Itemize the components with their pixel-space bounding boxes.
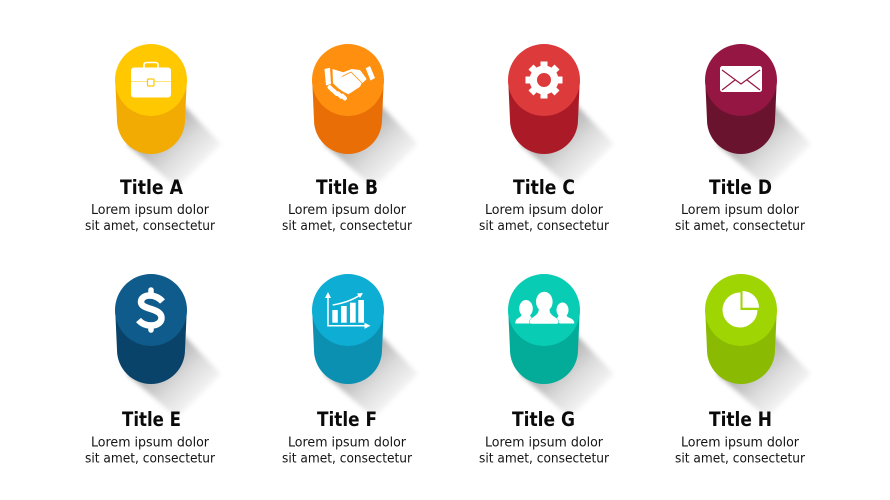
description: Lorem ipsum dolor [288,203,407,218]
icon: gear [526,62,562,98]
cylinder top [705,44,777,116]
description: sit amet, consectetur [282,219,413,234]
title: Title H [709,408,772,431]
description [85,203,216,234]
icon: bar chart [325,292,370,329]
cylinder top [508,274,580,346]
description: sit amet, consectetur [479,452,610,466]
cylinder body [508,310,580,384]
panel: Title G [479,274,614,466]
cylinder top [115,274,187,346]
description: Lorem ipsum dolor [91,203,210,218]
description: Lorem ipsum dolor [681,203,800,218]
panel: Title F [282,274,418,466]
title: Title D [709,176,772,199]
icon: pie chart [722,291,759,327]
panel: Title H [675,274,811,466]
description: sit amet, consectetur [282,452,413,466]
cylinder shadow [717,326,811,418]
cylinder shadow [127,96,221,188]
icon: envelope [720,66,762,92]
cylinder top [312,44,384,116]
description: Lorem ipsum dolor [91,436,210,450]
description: Lorem ipsum dolor [288,436,407,450]
description: Lorem ipsum dolor [485,203,604,218]
cylinder shadow [127,326,221,418]
cylinder body [115,80,187,154]
cylinder body [508,80,580,154]
cylinder shadow [324,326,418,418]
title: Title B [316,176,378,199]
description: sit amet, consectetur [479,219,610,234]
cylinder body [705,80,777,154]
description: Lorem ipsum dolor [485,436,604,450]
title: Title G [512,408,575,431]
icon: dollar sign [138,290,162,330]
cylinder top [312,274,384,346]
cylinder shadow [520,96,614,188]
description: sit amet, consectetur [85,219,216,234]
cylinder shadow [717,96,811,188]
cylinder shadow [324,96,418,188]
cylinder top [508,44,580,116]
description [85,436,216,466]
panel: Title A [85,44,221,234]
description: sit amet, consectetur [675,219,806,234]
description [282,436,413,466]
title: Title C [513,176,575,199]
description [282,203,413,234]
description: Lorem ipsum dolor [681,436,800,450]
panel: Title E [85,274,221,466]
description: sit amet, consectetur [85,452,216,466]
panel: Title D [675,44,811,234]
icon: handshake [324,66,375,101]
cylinder body [312,80,384,154]
panel: Title C [479,44,614,234]
cylinder top [705,274,777,346]
cylinder body [312,310,384,384]
description: sit amet, consectetur [675,452,806,466]
description [675,203,806,234]
cylinder shadow [520,326,614,418]
description [479,436,610,466]
icon: people [515,292,574,324]
title: Title F [317,408,377,431]
icon: briefcase [131,62,171,98]
description [675,436,806,466]
title: Title E [122,408,181,431]
title: Title A [120,176,183,199]
cylinder top [115,44,187,116]
panel: Title B [282,44,418,234]
cylinder body [115,310,187,384]
cylinder body [705,310,777,384]
description [479,203,610,234]
